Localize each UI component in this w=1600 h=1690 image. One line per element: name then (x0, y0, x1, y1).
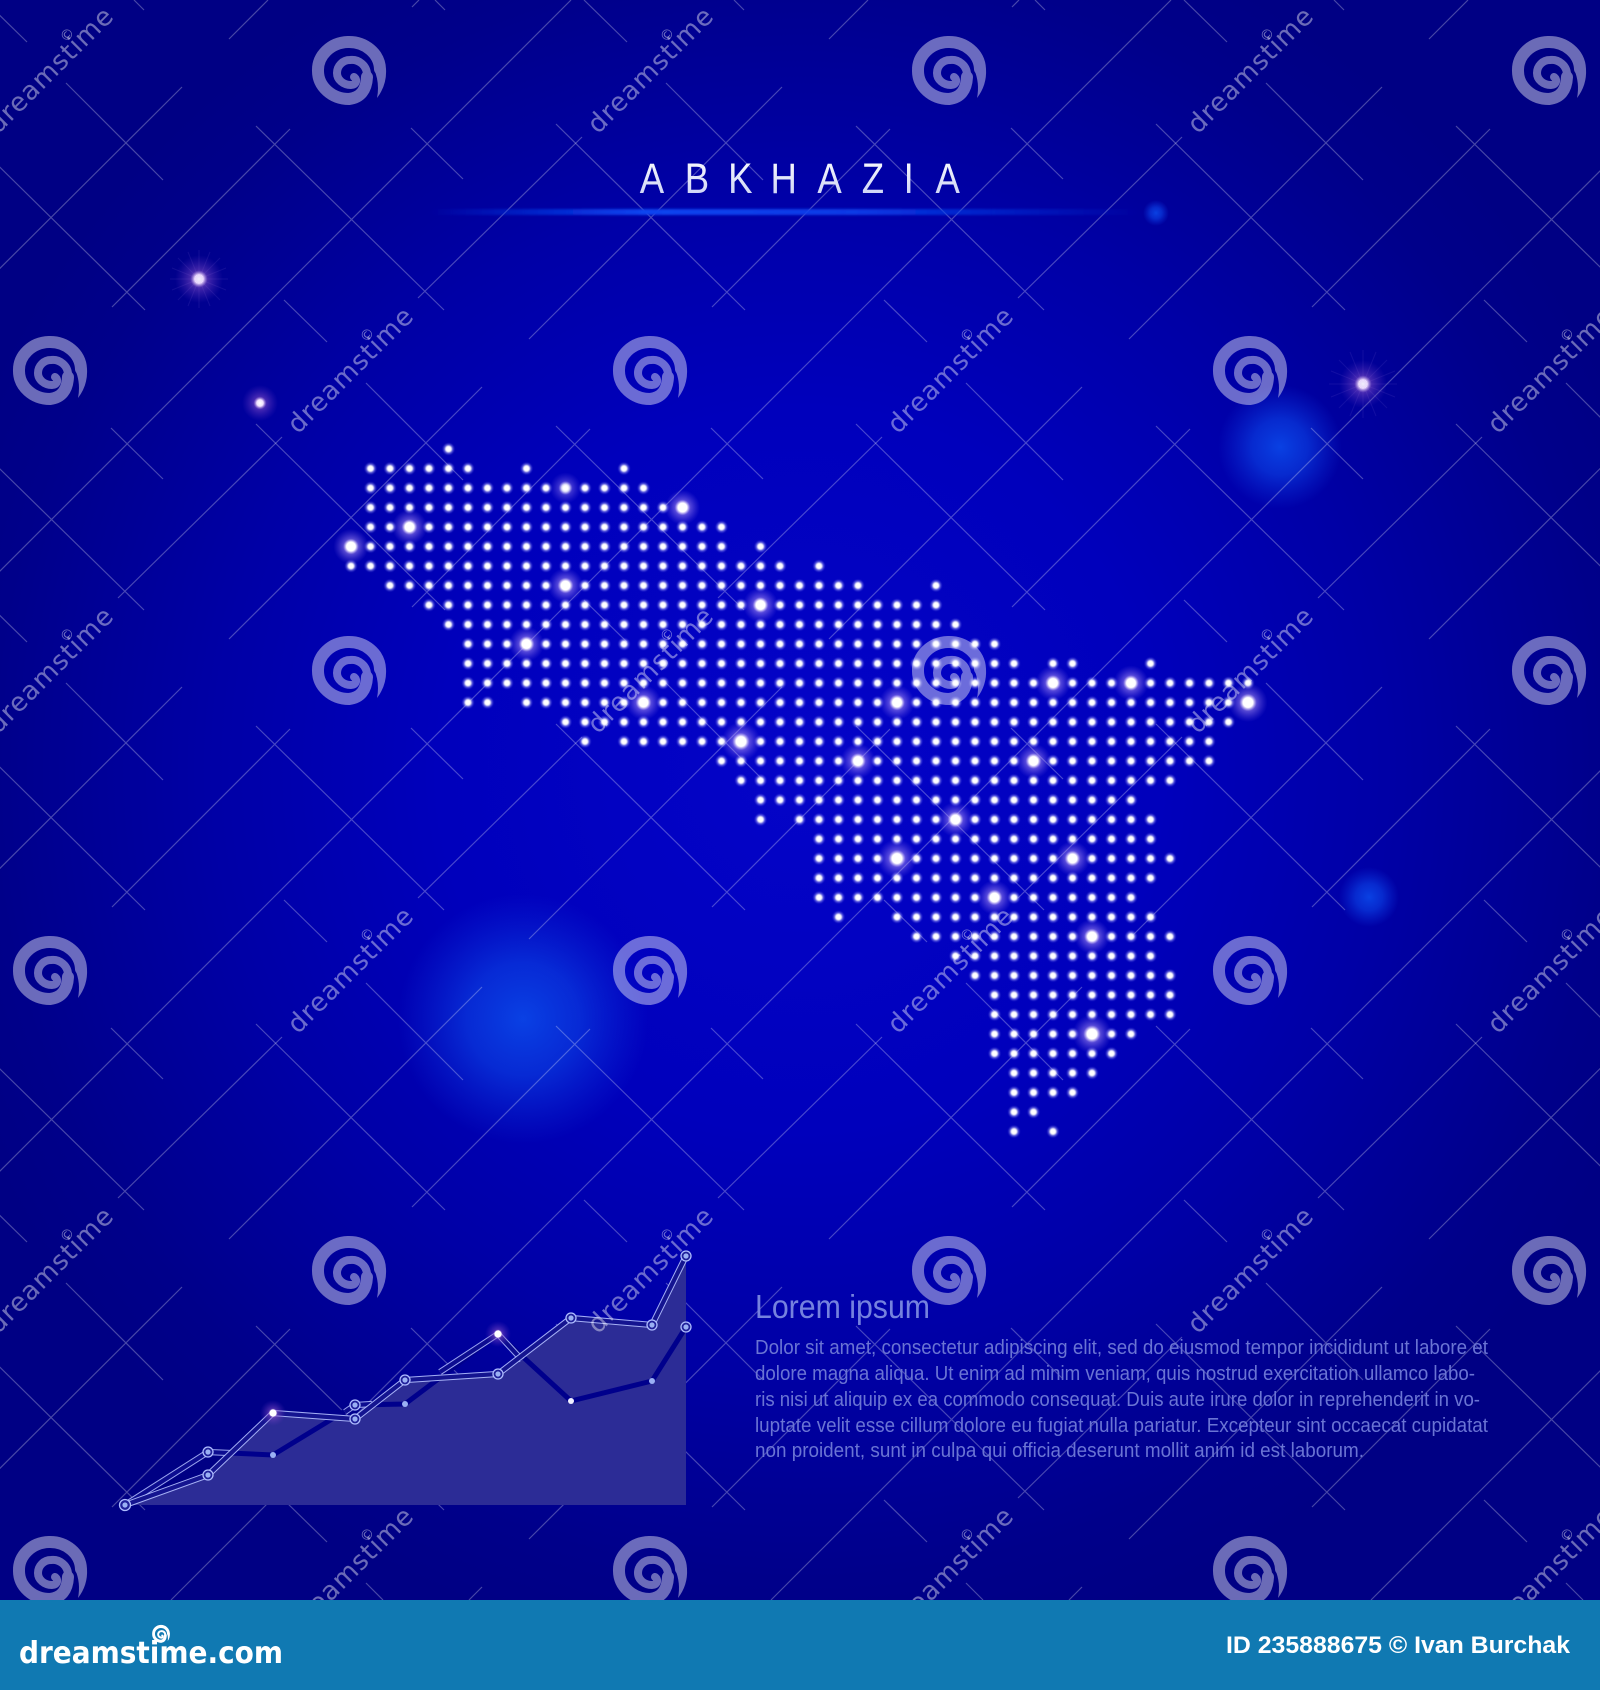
title: ABKHAZIA (640, 155, 960, 203)
footer banner (0, 1600, 1600, 1690)
chart markers (120, 1251, 691, 1510)
text block body: luptate velit esse cillum dolore eu fugiat nulla pariatur. Excepteur sint occaecat cupidatat (755, 1415, 1488, 1437)
watermark text: dreamstime (882, 1502, 1020, 1640)
watermark text: © (657, 25, 678, 46)
dark series line (125, 1327, 686, 1505)
text block heading: Lorem ipsum (755, 1288, 930, 1325)
watermark text: dreamstime (582, 1202, 720, 1340)
watermark text: © (1557, 325, 1578, 346)
watermark text: dreamstime (582, 602, 720, 740)
text block body (755, 1337, 1488, 1462)
watermark text: dreamstime (282, 302, 420, 440)
watermark text: dreamstime (582, 2, 720, 140)
chart peak highlights (260, 1321, 511, 1426)
watermark text: © (57, 625, 78, 646)
watermark text: dreamstime (882, 902, 1020, 1040)
watermark text: © (657, 625, 678, 646)
watermark text: © (357, 1525, 378, 1546)
watermark text: © (1257, 625, 1278, 646)
watermark text: © (957, 1525, 978, 1546)
glow: small right blue blob (1339, 867, 1399, 927)
footer image id and credit: ID 235888675 © Ivan Burchak (1226, 1632, 1571, 1659)
decorative star right (1329, 350, 1397, 418)
chart area fill (125, 1256, 686, 1505)
watermark text: © (657, 1225, 678, 1246)
text block body: dolore magna aliqua. Ut enim ad minim veniam, quis nostrud exercitation ullamco labo- (755, 1363, 1475, 1385)
watermark text: © (957, 925, 978, 946)
watermark text: dreamstime (1182, 2, 1320, 140)
watermark text: dreamstime (1182, 1202, 1320, 1340)
decorative star top left (170, 250, 228, 308)
area chart (120, 1251, 691, 1510)
watermark text: © (1557, 1525, 1578, 1546)
watermark text: dreamstime (1182, 602, 1320, 740)
watermark text: © (57, 1225, 78, 1246)
watermark text: dreamstime (282, 902, 420, 1040)
watermark text: © (957, 325, 978, 346)
dot map of Abkhazia (333, 449, 1268, 1132)
text block body: ris nisi ut aliquip ex ea commodo consequat. Duis aute irure dolor in reprehenderit in vo- (755, 1389, 1480, 1411)
decorative star left (242, 385, 278, 421)
outlined upper series line (125, 1256, 686, 1505)
text block body: Dolor sit amet, consectetur adipiscing elit, sed do eiusmod tempor incididunt ut labore et (755, 1337, 1488, 1359)
watermark text: dreamstime (882, 302, 1020, 440)
glow: upper right blue blob (1218, 385, 1342, 509)
watermark text: © (57, 25, 78, 46)
glow: large blue blob (398, 894, 648, 1144)
watermark text: © (1557, 925, 1578, 946)
outlined segments of dark series (125, 1334, 522, 1505)
watermark text: dreamstime (282, 1502, 420, 1640)
city glow points (333, 472, 1268, 1053)
footer logo: dreamstime.com (19, 1636, 283, 1671)
title underline light streak (430, 200, 1169, 226)
watermark text: © (1257, 25, 1278, 46)
watermark text: © (357, 925, 378, 946)
watermark text: © (357, 325, 378, 346)
text block body: non proident, sunt in culpa qui officia deserunt mollit anim id est laborum. (755, 1440, 1364, 1462)
watermark text: © (1257, 1225, 1278, 1246)
